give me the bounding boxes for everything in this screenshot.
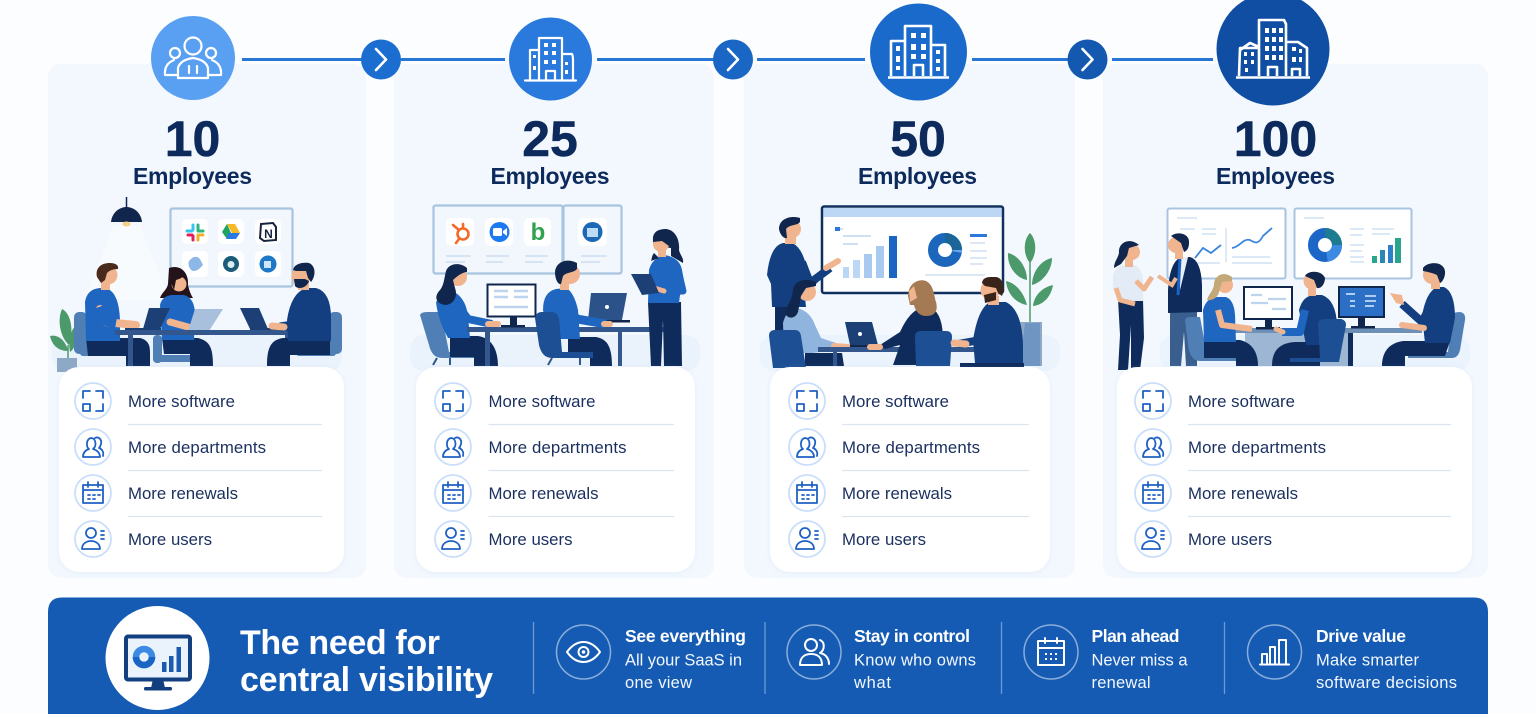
table <box>467 327 668 366</box>
icon: users <box>75 521 111 557</box>
line chart board <box>1168 208 1286 278</box>
heading: 10 employees: Employees <box>133 163 252 189</box>
scene: 100 employees <box>1113 208 1470 371</box>
icon: medium office <box>870 4 967 100</box>
donut and bars board <box>1294 208 1412 278</box>
panel: 10 employees <box>48 64 366 578</box>
icon: renewals <box>75 475 111 511</box>
item: plan ahead: Plan ahead <box>1092 626 1180 646</box>
plant <box>50 309 77 372</box>
icon: renewals <box>435 475 471 511</box>
icon: renewals <box>1135 475 1171 511</box>
label: more departments: More departments <box>488 438 626 457</box>
icon: small office <box>509 18 592 100</box>
heading: 10 employees <box>133 111 252 189</box>
arrow: 50 to 100 <box>1068 40 1108 80</box>
banner: central visibility <box>48 598 1488 714</box>
monitor <box>488 284 536 328</box>
item: stay in control <box>787 625 976 692</box>
item: stay in control: Know who owns <box>854 652 976 670</box>
label: more software: More software <box>488 392 596 411</box>
icon: software <box>1135 383 1171 419</box>
heading: 50 employees: 50 <box>890 111 946 167</box>
person: man right <box>267 263 342 366</box>
heading: 25 employees <box>490 111 610 189</box>
item: plan ahead: renewal <box>1092 674 1150 692</box>
icon: slack <box>187 225 203 240</box>
label: more departments: More departments <box>1188 438 1326 457</box>
heading: 100 employees: Employees <box>1216 163 1335 189</box>
icon: large office <box>1216 0 1330 106</box>
icon: blue app <box>260 256 276 272</box>
laptop <box>845 322 880 347</box>
scene: 25 employees <box>410 206 700 371</box>
icon: teal app <box>223 256 239 272</box>
label: more users: More users <box>488 530 572 549</box>
monitor: blue <box>1339 287 1384 328</box>
label: more users: More users <box>128 530 212 549</box>
icon: departments <box>789 429 825 465</box>
banner heading <box>240 624 493 699</box>
icon: drive <box>222 224 240 239</box>
icon: users <box>789 521 825 557</box>
icon: software <box>435 383 471 419</box>
banner heading: central visibility <box>240 661 493 699</box>
heading: 50 employees <box>858 111 977 189</box>
label: more renewals: More renewals <box>488 484 598 503</box>
monitor: white <box>1244 287 1292 330</box>
icon: departments <box>75 429 111 465</box>
item: see everything: All your SaaS in <box>625 652 742 670</box>
icon: users <box>435 521 471 557</box>
person: man seated <box>535 261 612 366</box>
plant <box>1006 233 1053 366</box>
icon: notion <box>260 223 276 241</box>
icon: b app: b <box>531 219 545 246</box>
item: plan ahead: Never miss a <box>1092 652 1188 670</box>
icon: departments <box>1135 429 1171 465</box>
dashboard screen <box>822 206 1003 293</box>
item: drive value <box>1248 625 1457 692</box>
label: more renewals: More renewals <box>842 484 952 503</box>
laptops <box>125 308 280 331</box>
laptop <box>588 293 630 322</box>
card: 100 employees list <box>1117 367 1472 572</box>
item: drive value: Drive value <box>1316 626 1406 646</box>
person: woman in light blue <box>769 280 848 368</box>
label: more renewals: More renewals <box>128 484 238 503</box>
arrow: 10 to 25 <box>361 40 401 80</box>
label: more departments: More departments <box>842 438 980 457</box>
person: presenter <box>767 217 838 332</box>
person: man right <box>954 277 1040 368</box>
icon: renewals <box>789 475 825 511</box>
person: man right <box>1382 263 1465 366</box>
icon: software <box>789 383 825 419</box>
person: woman centre <box>153 267 213 366</box>
label: more software: More software <box>128 392 235 411</box>
panel: 50 employees <box>744 64 1075 578</box>
card: 25 employees list <box>416 367 695 572</box>
icon: pale blue app <box>189 257 203 271</box>
scene: 50 employees <box>760 206 1060 371</box>
panel: 100 employees <box>1103 64 1488 578</box>
icon: dashboard monitor <box>106 606 210 710</box>
item: see everything: See everything <box>625 626 746 646</box>
item: drive value: software decisions <box>1316 674 1457 692</box>
timeline connectors <box>242 58 1213 61</box>
heading: 10 employees: 10 <box>165 111 220 167</box>
heading: 50 employees: Employees <box>858 163 977 189</box>
icon: blue app <box>582 222 602 242</box>
scene: 10 employees team at a table <box>50 197 342 372</box>
heading: 25 employees: Employees <box>490 163 610 189</box>
label: more users: More users <box>1188 530 1272 549</box>
heading: 100 employees <box>1216 111 1335 189</box>
card: 10 employees list <box>59 367 344 572</box>
table <box>1225 328 1422 366</box>
person: man in suit <box>1158 233 1202 366</box>
person: man left <box>74 263 150 366</box>
item: stay in control: what <box>853 674 891 692</box>
person: woman seated <box>420 264 498 366</box>
icon: software <box>75 383 111 419</box>
banner heading: The need for <box>240 624 440 662</box>
icon: hubspot <box>453 224 468 243</box>
icon: people group <box>151 16 235 100</box>
label: more users: More users <box>842 530 926 549</box>
person: woman standing <box>1113 241 1152 370</box>
label: more renewals: More renewals <box>1188 484 1298 503</box>
table <box>115 330 302 366</box>
label: more software: More software <box>1188 392 1295 411</box>
table <box>818 347 993 366</box>
item: see everything: one view <box>625 674 692 692</box>
icon: departments <box>435 429 471 465</box>
icon: notion: N <box>264 227 273 241</box>
panel: 25 employees <box>394 64 714 578</box>
heading: 100 employees: 100 <box>1234 111 1317 167</box>
label: more departments: More departments <box>128 438 266 457</box>
item: drive value: Make smarter <box>1316 652 1420 670</box>
item: see everything <box>556 625 746 692</box>
item: plan ahead <box>1024 625 1188 692</box>
icon: zoom <box>490 222 510 242</box>
person: blonde woman <box>1185 274 1258 366</box>
person: man from back <box>1272 272 1346 366</box>
label: more software: More software <box>842 392 949 411</box>
card: 50 employees list <box>770 367 1050 572</box>
item: stay in control: Stay in control <box>854 626 970 646</box>
arrow: 25 to 50 <box>713 40 753 80</box>
person: woman standing with tablet <box>631 229 686 366</box>
heading: 25 employees: 25 <box>522 111 578 167</box>
icon: users <box>1135 521 1171 557</box>
person: woman from back <box>870 280 952 366</box>
